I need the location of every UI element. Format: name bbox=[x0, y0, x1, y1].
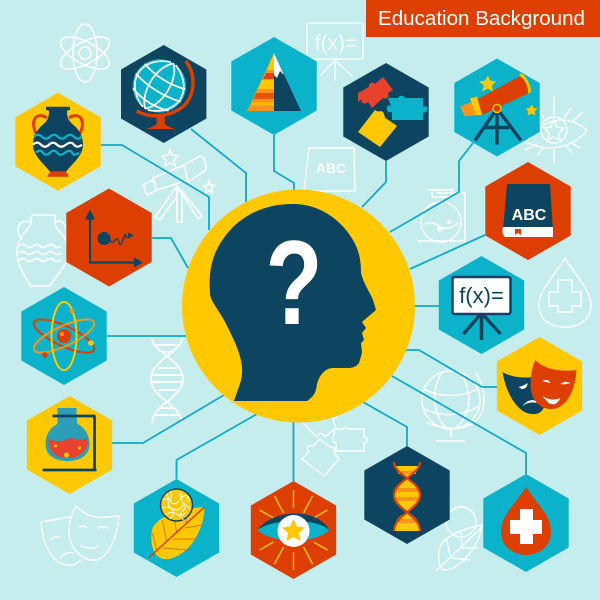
outline icon: vase bbox=[17, 215, 68, 286]
outline icon: masks bbox=[41, 506, 119, 565]
hex: theatre masks bbox=[497, 337, 582, 435]
outline icon: DNA bbox=[151, 338, 183, 423]
outline icon: ABC book bbox=[304, 148, 355, 191]
hex: formula board bbox=[439, 256, 524, 354]
hex: vase bbox=[15, 93, 101, 191]
title banner bbox=[366, 0, 600, 37]
outline label: ABC: ABC bbox=[316, 160, 346, 176]
hex: globe bbox=[121, 45, 206, 143]
central circle with head bbox=[182, 190, 415, 422]
outline icon: leaf and lens bbox=[436, 507, 482, 571]
outline icon: globe bbox=[422, 371, 484, 441]
board label: f(x)= bbox=[459, 283, 504, 308]
outline icon: atom bbox=[56, 24, 114, 82]
hex: leaf and lens bbox=[134, 479, 219, 577]
hex: telescope bbox=[454, 58, 540, 156]
outline icon: eye bbox=[525, 97, 587, 163]
hex: ABC book bbox=[485, 162, 571, 260]
hex: eye bbox=[251, 481, 336, 579]
hex: blood drop bbox=[483, 474, 569, 572]
hex: puzzle bbox=[343, 63, 429, 161]
outline icon: puzzle bbox=[302, 416, 367, 476]
hex: mountain bbox=[231, 37, 317, 135]
hex: atom bbox=[21, 287, 107, 385]
outline icon: formula board bbox=[307, 23, 363, 81]
head silhouette bbox=[210, 204, 376, 401]
book label: ABC bbox=[512, 207, 547, 224]
outline label: f(x)=: f(x)= bbox=[315, 32, 357, 55]
hex: graph bbox=[66, 188, 152, 286]
outline icon: telescope bbox=[143, 150, 214, 222]
hex: flask bbox=[27, 396, 112, 494]
question mark: ? bbox=[265, 216, 323, 350]
title text: Education Background bbox=[378, 7, 585, 30]
outline icon: flask bbox=[418, 190, 466, 242]
hex: DNA bbox=[364, 446, 450, 544]
outline icon: blood drop bbox=[539, 258, 591, 327]
connector lines bbox=[101, 129, 526, 481]
